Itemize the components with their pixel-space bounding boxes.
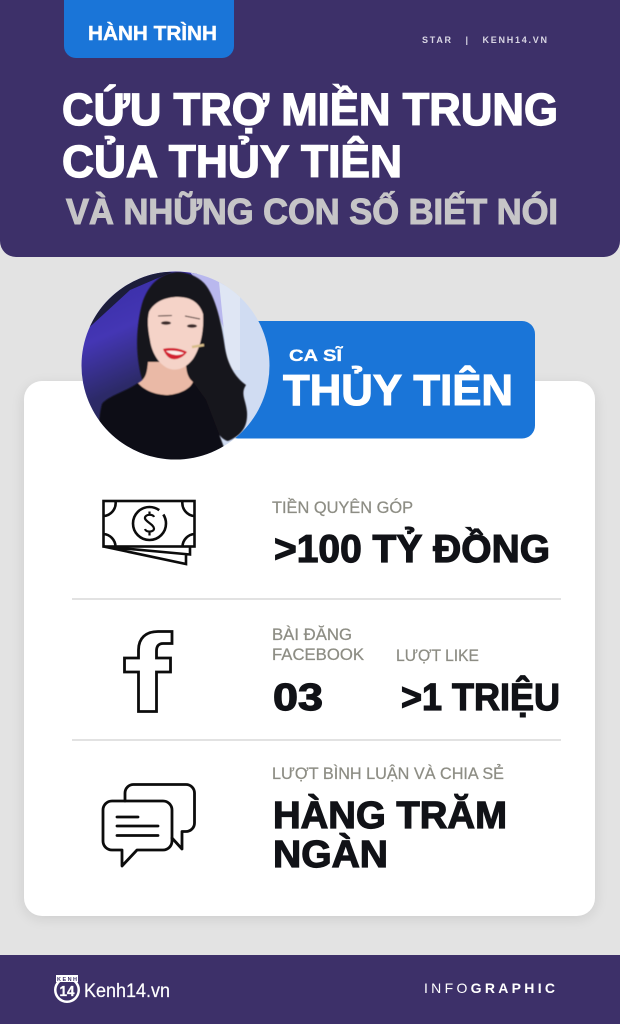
title: CỨU TRỢ MIỀN TRUNG [62,84,558,135]
value: over 1 million: >1 TRIỆU [401,675,560,719]
title [62,84,558,232]
logo: kenh14: KENH [57,977,77,983]
value: 03: 03 [273,677,323,719]
label: infographic: INFOGRAPHIC [424,980,555,996]
portrait photo [81,271,271,470]
footer bar [0,955,620,1024]
value: hundreds of thousands: NGÀN [273,832,388,876]
row: facebook [124,625,560,719]
name banner: THỦY TIÊN [283,364,513,415]
label: bài đăng facebook [272,625,365,664]
main card [24,381,595,918]
label: lượt like: LƯỢT LIKE [396,646,479,665]
logo: kenh14 [54,975,170,1003]
label: lượt bình luận và chia sẻ: LƯỢT BÌNH LUẬN VÀ CHIA SẺ [272,764,504,783]
value: over 100 billion: >100 TỶ ĐỒNG [274,527,550,571]
icon: facebook f [124,632,172,712]
name banner: CA SĨ [289,345,344,365]
name banner [225,321,535,438]
source label: STAR | KENH14.VN [422,35,547,45]
title: CỦA THỦY TIÊN [62,136,402,187]
logo: kenh14: Kenh14.vn [84,981,170,1002]
value: hundreds of thousands [273,793,507,876]
label: bài đăng facebook: BÀI ĐĂNG [272,625,352,644]
row: donation [104,498,550,571]
icon: banknotes [104,501,194,564]
value: hundreds of thousands: HÀNG TRĂM [273,793,507,837]
label: tiền quyên góp: TIỀN QUYÊN GÓP [272,498,413,517]
title: VÀ NHỮNG CON SỐ BIẾT NÓI [66,190,558,232]
tag: hành trình: HÀNH TRÌNH [88,22,217,45]
header panel [0,0,620,257]
logo: kenh14: 14 [60,983,75,1000]
icon: chat bubbles [103,784,194,866]
label: bài đăng facebook: FACEBOOK [272,645,365,664]
tag: hành trình [64,0,234,58]
row: comments and shares [103,764,507,876]
